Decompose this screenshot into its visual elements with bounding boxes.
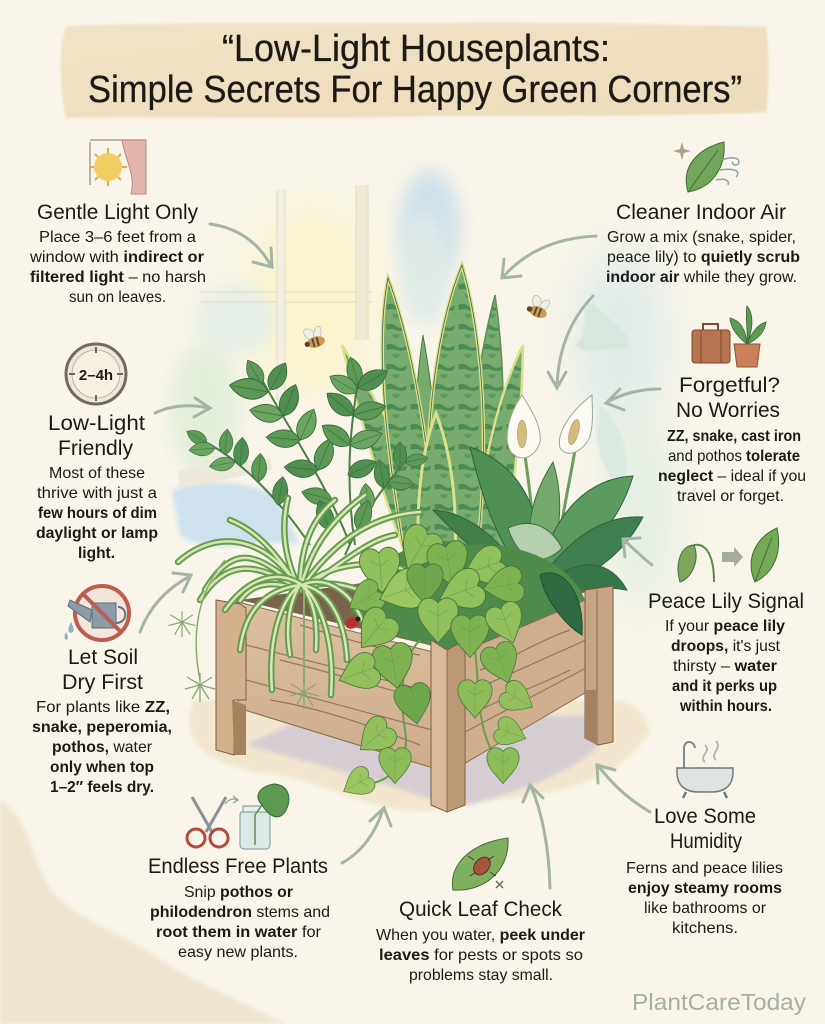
panel: low-light friendly [36,344,158,562]
icon: wilted to healthy leaf [678,528,779,582]
body text [626,860,783,937]
body text: filtered light – no harsh [30,269,206,286]
icon: scissors and jar cutting [187,784,289,849]
icon: leaf with sparkles [673,142,739,192]
body text: If your peace lily [665,618,785,635]
body text: ZZ, snake, cast iron [667,428,801,445]
bee right [525,292,553,320]
body text [606,229,800,286]
heading: Dry First [62,670,143,694]
plant: peace lily back leaves and flowers [433,395,643,610]
arrow: cleaner air to lily [548,296,593,388]
body text [32,699,172,796]
heading: No Worries [676,398,780,422]
heading: Love Some [654,804,756,828]
floor wash and planter shadow [189,700,650,811]
heading: Let Soil [68,645,138,669]
panel: love some humidity [626,741,783,937]
title line 1: “Low-Light Houseplants: [222,28,610,70]
body text: only when top [50,759,154,776]
body text: snake, peperomia, [32,719,172,736]
plant: spider plant back leaves [168,495,420,702]
body text: root them in water for [156,924,322,941]
body text: window with indirect or [29,249,204,266]
body text: philodendron stems and [150,904,330,921]
body text: problems stay small. [409,967,553,984]
body text: Most of these [49,465,145,482]
front post [431,640,465,812]
arrow: quick check [523,785,550,888]
body text: daylight or lamp [36,525,158,542]
heading: Friendly [58,436,133,460]
arrow: endless plants [342,808,391,863]
panel: cleaner indoor air [606,142,800,286]
background watercolor wash: bottom left [0,800,285,1024]
heading [62,645,143,694]
body text: within hours. [679,698,772,715]
heading: Forgetful? [679,373,780,397]
arrow: humidity [597,765,650,812]
body text: indoor air while they grow. [606,269,797,286]
heading: Peace Lily Signal [648,589,804,613]
left post [216,600,246,755]
body text: thirsty – water [673,658,777,675]
body text: Ferns and peace lilies [626,860,783,877]
icon: leaf with bug [452,838,508,890]
icon: clock: 2–4h [79,367,113,384]
heading: Cleaner Indoor Air [616,200,786,224]
body text [658,428,806,505]
right post [585,586,613,745]
heading: Low-Light [48,411,145,435]
arrow: let soil [140,573,191,632]
icon: clock [66,344,126,404]
peace lily drooping front leaf [540,573,582,635]
right panel [462,598,590,765]
panel: quick leaf check [376,838,585,984]
wooden planter box [216,586,613,812]
icon: bathtub [677,741,733,798]
icon: no watering can [64,586,129,640]
left panel [238,602,433,768]
icon: suitcase and potted plant [692,306,766,367]
heading: Endless Free Plants [148,854,328,878]
arrow: low-light [155,398,210,417]
planter soil [240,575,590,650]
body text [36,465,158,562]
plant: snake plant [342,265,523,600]
foliage mass behind pothos [350,541,585,650]
title banner [61,23,768,118]
body text: pothos, water [52,739,153,756]
body text: When you water, peek under [376,927,585,944]
body text: kitchens. [672,920,738,937]
body text: travel or forget. [677,488,784,505]
bee left [300,323,327,350]
panel: gentle light only [29,140,206,306]
illustration: planter with houseplants [168,265,643,812]
arrow: forgetful [606,389,660,410]
background: window and color washes [170,170,675,610]
body text: sun on leaves. [69,289,166,306]
body text: 1–2″ feels dry. [50,779,154,796]
body text: Place 3–6 feet from a [39,229,196,246]
body text: droops, it's just [671,638,781,655]
panel: endless free plants [148,784,330,961]
body text: Snip pothos or [184,884,293,901]
heading: Gentle Light Only [37,200,198,224]
heading [676,373,780,422]
body text [29,229,206,306]
panel: forgetful [658,306,806,505]
plant: spider plant front leaves [225,577,362,709]
watermark: PlantCareToday [632,989,807,1015]
heading [48,411,145,460]
body text [376,927,585,984]
panel: peace lily signal [648,528,804,715]
plant: pothos [333,520,540,804]
heading: Quick Leaf Check [399,897,562,921]
body text [150,884,330,961]
ladybug [343,615,361,631]
body text: peace lily) to quietly scrub [607,249,800,266]
icon: sun and curtain [90,140,146,194]
arrow: peace lily [623,538,652,565]
body text: Grow a mix (snake, spider, [607,229,796,246]
body text: For plants like ZZ, [36,699,170,716]
heading [654,804,756,853]
body text: and pothos tolerate [668,448,800,465]
body text: thrive with just a [37,485,157,502]
body text: leaves for pests or spots so [379,947,583,964]
body text: neglect – ideal if you [658,468,806,485]
body text: easy new plants. [178,944,298,961]
panel: let soil dry first [32,586,172,796]
body text [665,618,785,715]
body text: enjoy steamy rooms [628,880,782,897]
body text: light. [78,545,115,562]
title line 2: Simple Secrets For Happy Green Corners” [88,69,742,111]
arrow: gentle light [210,224,272,267]
plant: ZZ plant [184,355,429,555]
body text: like bathrooms or [644,900,767,917]
body text: few hours of dim [38,505,157,522]
heading: Humidity [670,829,742,853]
body text: and it perks up [672,678,777,695]
arrow: cleaner air to plant [502,236,596,278]
